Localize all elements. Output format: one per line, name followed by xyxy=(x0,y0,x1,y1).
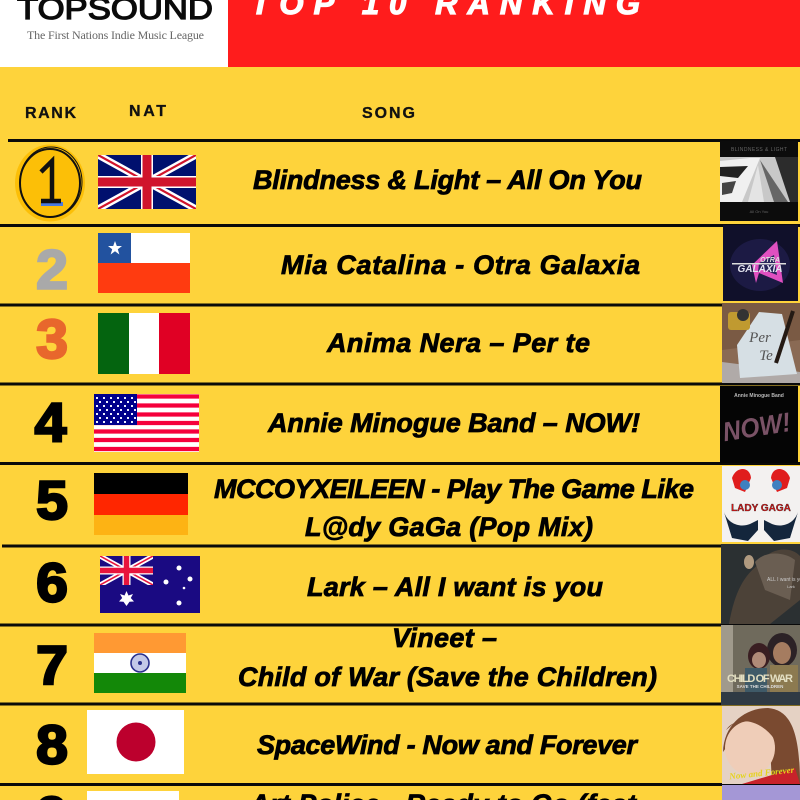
album art: Child of War xyxy=(721,625,800,705)
header: title banner xyxy=(228,0,800,67)
song title, two lines: Child of War (Save the Children) xyxy=(238,662,657,692)
album art: NOW! xyxy=(720,386,798,463)
rank 3: 3 xyxy=(36,308,68,370)
rank 8: 8 xyxy=(36,714,68,775)
flag: UK xyxy=(98,155,196,209)
album art: Child of War: CHILD OF WAR xyxy=(727,673,793,685)
song title: SpaceWind - Now and Forever xyxy=(257,730,638,760)
album art: All On You: BLINDNESS & LIGHT xyxy=(731,147,787,153)
album art: Otra Galaxia: OTRA xyxy=(760,257,780,264)
album art: Per te: Per xyxy=(748,330,771,346)
album art: Otra Galaxia: GALAXIA xyxy=(738,264,782,275)
song title: Mia Catalina - Otra Galaxia xyxy=(281,250,640,280)
album art: Now and Forever: Now and Forever xyxy=(728,765,795,781)
flag: USA xyxy=(94,394,199,452)
flag: Germany xyxy=(94,473,188,535)
row 6 xyxy=(36,544,800,624)
column heading: song: SONG xyxy=(362,105,415,122)
row 9 xyxy=(36,785,800,800)
album art: Per te xyxy=(722,303,800,383)
column heading: nationality: NAT xyxy=(129,103,166,120)
row 1 xyxy=(15,141,798,222)
flag: Australia xyxy=(100,556,200,613)
header: logo panel: The First Nations Indie Music League xyxy=(27,28,204,42)
row 3 xyxy=(36,303,800,383)
rank 6: 6 xyxy=(36,552,68,613)
album art: Lark: Lark xyxy=(787,584,795,589)
column heading: rank: RANK xyxy=(25,105,76,122)
album art: Lady Gaga: LADY GAGA xyxy=(731,503,791,514)
row 5 xyxy=(36,466,800,542)
album art: All On You xyxy=(720,141,798,221)
rank 7: 7 xyxy=(36,634,68,696)
flag: partial white flag xyxy=(87,791,179,800)
album art: Lark xyxy=(721,544,800,624)
song title, two lines xyxy=(238,623,657,692)
album art: partial xyxy=(722,785,800,800)
album art: NOW!: Annie Minogue Band xyxy=(734,393,784,399)
song title, two lines: L@dy GaGa (Pop Mix) xyxy=(305,512,593,542)
flag: Italy xyxy=(98,313,190,374)
header: logo panel xyxy=(0,0,228,67)
row 8 xyxy=(36,706,800,784)
song title, two lines: Vineet – xyxy=(392,623,497,653)
album art: Child of War: SAVE THE CHILDREN xyxy=(737,684,783,689)
song title: Annie Minogue Band – NOW! xyxy=(267,408,640,438)
rank 4: 4 xyxy=(35,391,66,453)
song title: Blindness & Light – All On You xyxy=(253,165,642,195)
flag: India xyxy=(94,633,186,693)
rank 5: 5 xyxy=(36,469,68,531)
flag: Chile xyxy=(98,233,190,293)
song title, two lines xyxy=(214,474,694,542)
album art: Now and Forever xyxy=(722,706,800,784)
song title, two lines: MCCOYXEILEEN - Play The Game Like xyxy=(214,474,694,504)
flag: Japan xyxy=(87,710,184,774)
row 2 xyxy=(36,225,798,301)
rank 1 badge xyxy=(15,144,85,222)
album art: Lady Gaga xyxy=(722,466,800,542)
row 7 xyxy=(36,623,800,705)
album art: Otra Galaxia xyxy=(723,225,798,301)
album art: NOW!: NOW! xyxy=(721,407,793,447)
album art: Per te: Te xyxy=(759,348,773,364)
song title: Anima Nera – Per te xyxy=(326,328,590,358)
rank 2: 2 xyxy=(36,239,68,300)
album art: All On You: All On You xyxy=(750,209,768,214)
row 4 xyxy=(35,386,798,463)
song title: Lark – All I want is you xyxy=(307,572,604,602)
